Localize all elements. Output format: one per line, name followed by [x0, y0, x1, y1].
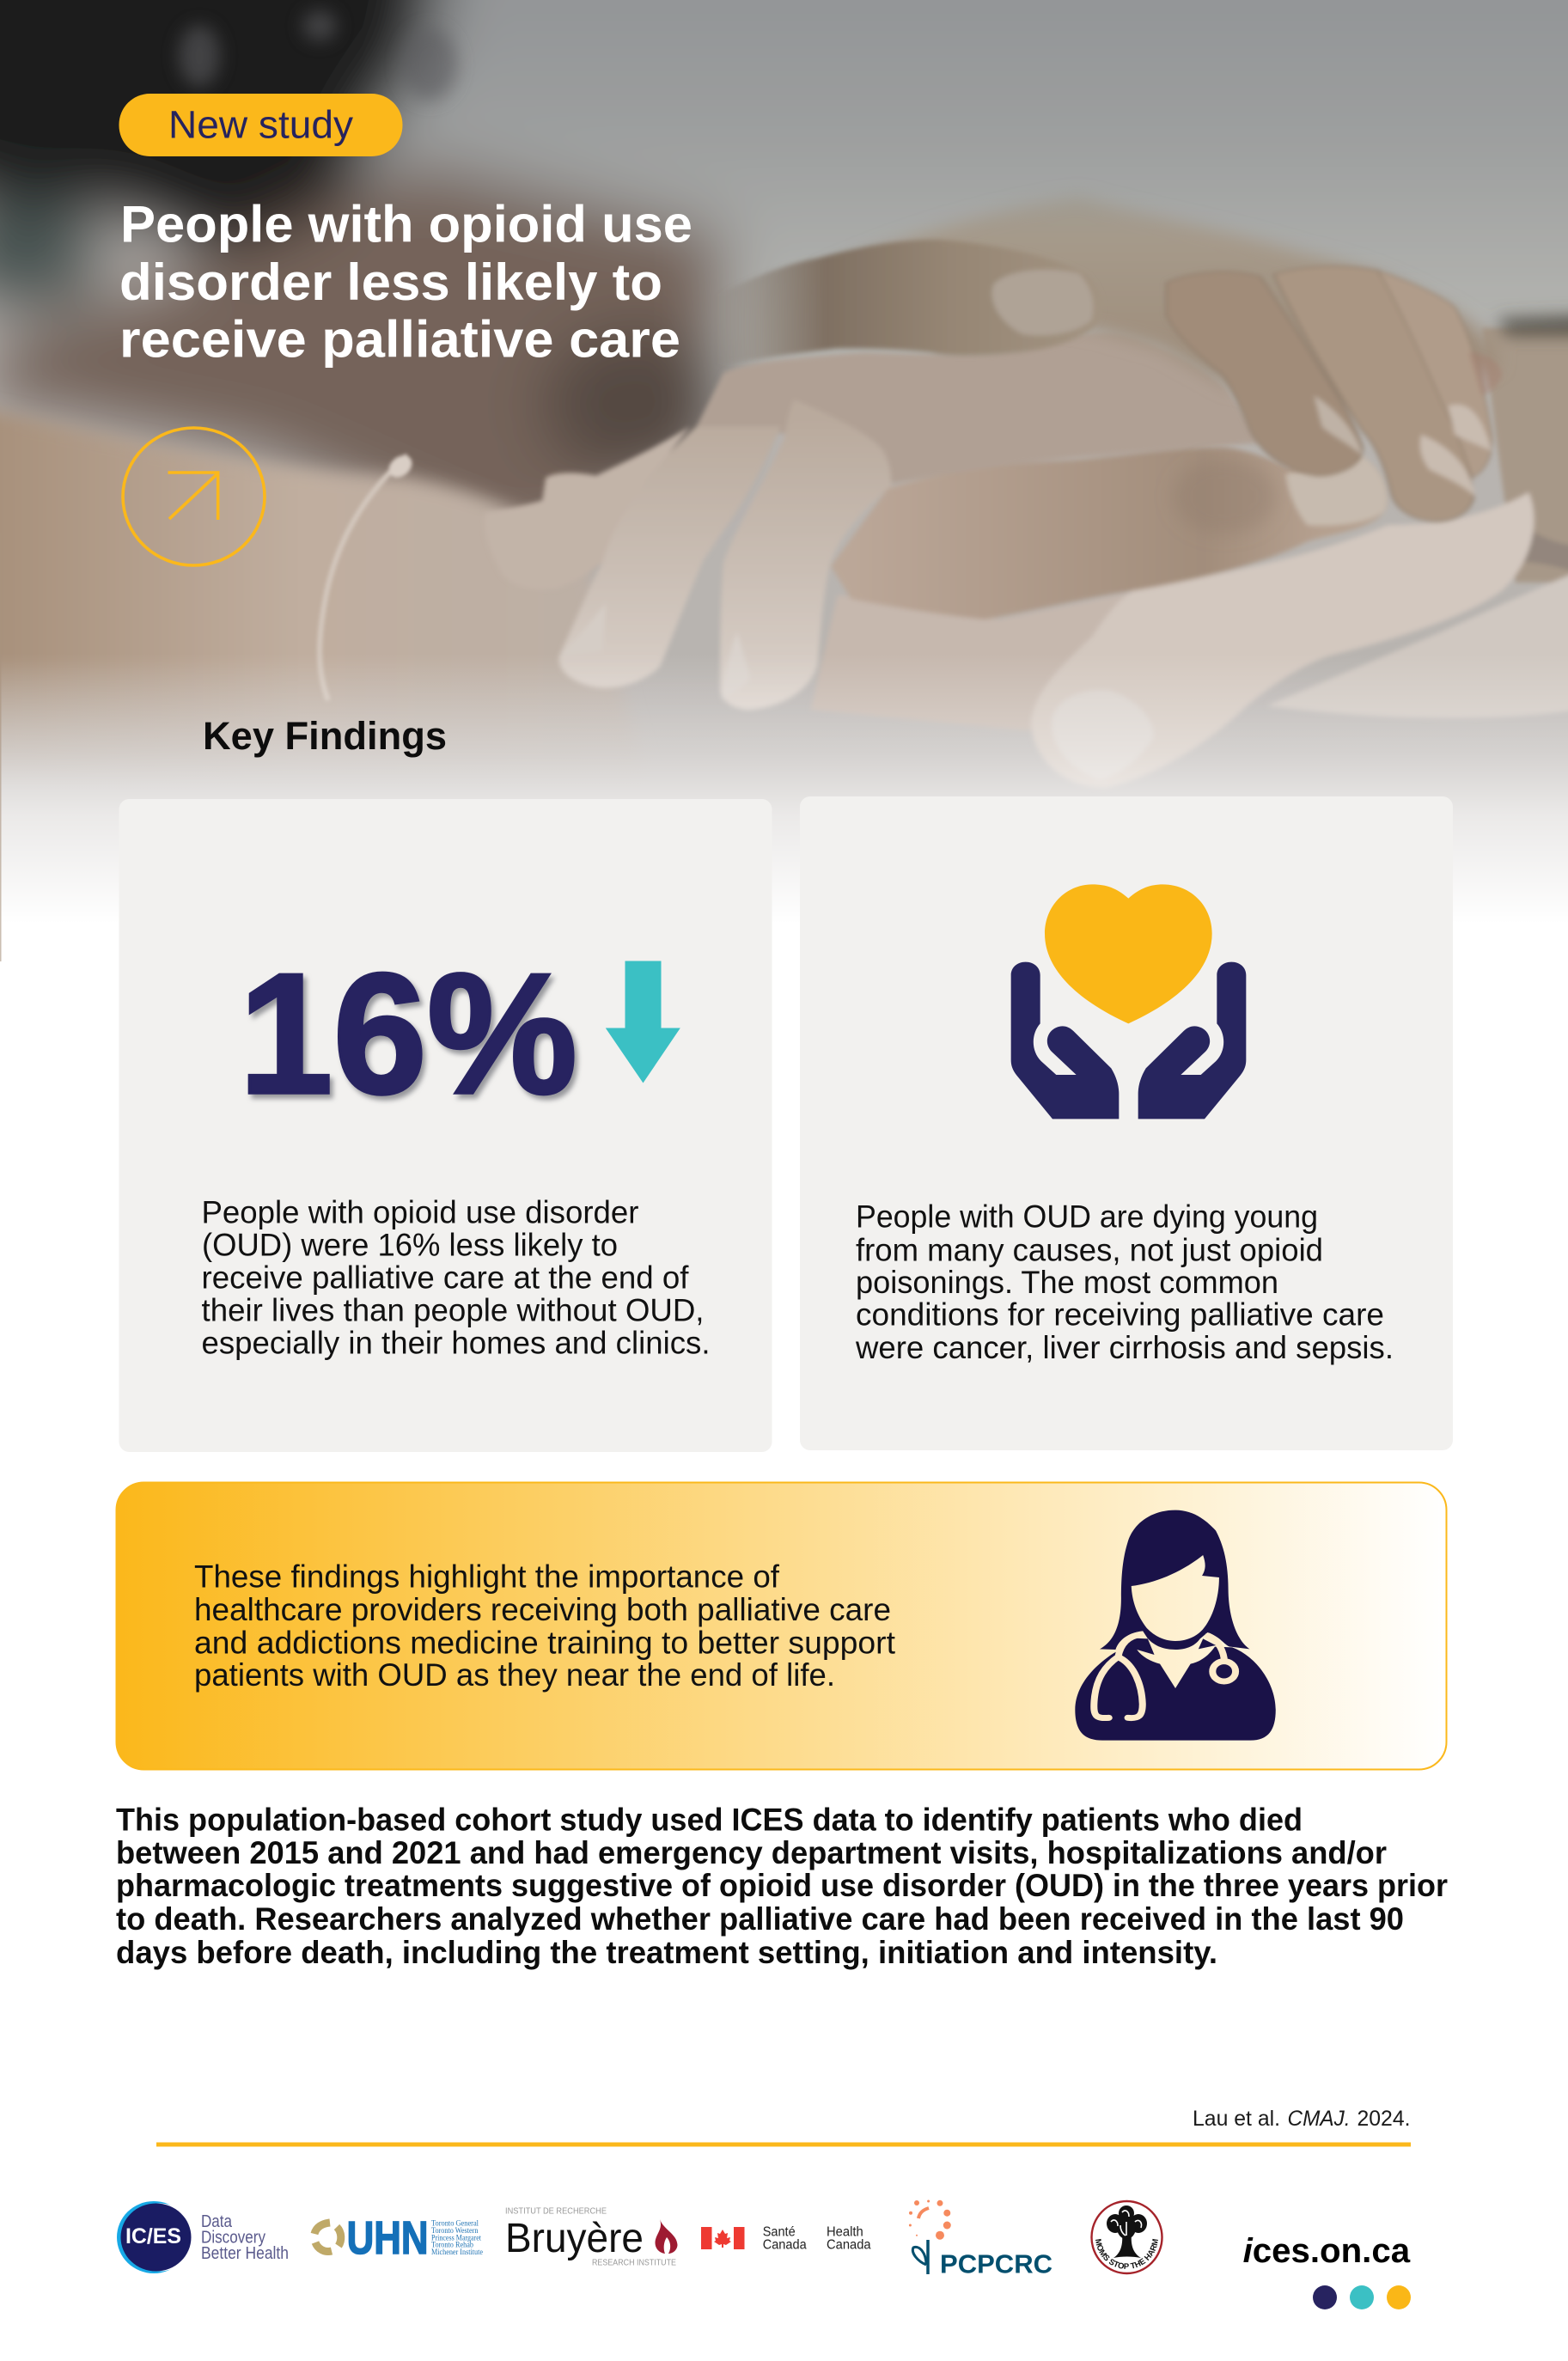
citation: Lau et al. [1193, 2107, 1280, 2131]
logo: Bruyère: Bruyère [505, 2216, 644, 2261]
logo: UHN: Princess Margaret [431, 2234, 481, 2242]
logo: Health Canada [701, 2225, 871, 2253]
hands: lower and middle [485, 328, 1568, 788]
text: 16% finding description: receive palliative care at the end of [201, 1260, 689, 1295]
text: study methods: between 2015 and 2021 and had emergency department visits, hospitalizations and/or [116, 1835, 1387, 1870]
logo: Health Canada: Health [827, 2225, 863, 2240]
text: 16% finding description: (OUD) were 16% less likely to [202, 1228, 618, 1263]
panel: 16% finding [119, 799, 772, 1452]
title: receive palliative care [119, 311, 680, 368]
text: training message: healthcare providers receiving both palliative care [194, 1592, 891, 1627]
logo: IC/ES: Discovery [201, 2229, 265, 2248]
text: 16% finding description: their lives than people without OUD, [201, 1293, 705, 1328]
logo: Health Canada: Canada [763, 2238, 807, 2253]
logo: Bruyère: INSTITUT DE RECHERCHE [505, 2207, 607, 2217]
logo: IC/ES: Data [201, 2212, 233, 2231]
text: study methods: pharmacologic treatments suggestive of opioid use disorder (OUD) in the three years prior [116, 1868, 1448, 1903]
callout: training banner [117, 1483, 1447, 1770]
white fade [0, 671, 1568, 924]
text: training message [194, 1559, 896, 1693]
text: dying young description: poisonings. The most common [856, 1265, 1278, 1300]
logo: IC/ES: Better Health [201, 2244, 289, 2263]
icon: doctor with stethoscope [1075, 1510, 1276, 1741]
citation: CMAJ. [1287, 2107, 1351, 2131]
big statistic: 16%: 16% [239, 938, 577, 1130]
logo: Moms Stop the Harm: MOMS STOP THE HARM [1095, 2239, 1158, 2269]
text: dying young description: from many causes, not just opioid [856, 1232, 1323, 1267]
text: 16% finding description: People with opioid use disorder [201, 1194, 639, 1229]
heading: Key Findings: Key Findings [203, 714, 447, 758]
bracelet [320, 451, 417, 700]
text: dying young description: People with OUD are dying young [856, 1199, 1318, 1235]
logo: PCPCRC: PCPCRC [940, 2249, 1052, 2279]
logo: Health Canada: Canada [827, 2238, 871, 2253]
text: training message: and addictions medicine training to better support [194, 1625, 896, 1660]
website: ices.on.ca: ices.on.ca [1243, 2232, 1411, 2270]
logo: UHN: Toronto General [431, 2220, 479, 2229]
title [119, 196, 692, 368]
citation [1193, 2107, 1411, 2131]
bokeh [179, 10, 457, 101]
hero photo: hands held together [0, 0, 1568, 1031]
title: People with opioid use [120, 196, 692, 253]
panel: dying young finding [800, 796, 1453, 1450]
logo: Moms Stop the Harm [1090, 2199, 1163, 2275]
badge: New study [119, 94, 402, 156]
logo: UHN: Toronto Rehab [431, 2242, 473, 2250]
logo: UHN [314, 2212, 483, 2264]
text: 16% finding description [201, 1194, 710, 1361]
decorative dots: navy, teal, yellow [1313, 2285, 1411, 2309]
logo: Bruyère [505, 2207, 677, 2268]
logo: Health Canada: Santé [763, 2225, 796, 2240]
darker knuckle on lower thumb [1215, 467, 1271, 526]
badge: New study: New study [168, 103, 353, 146]
text: training message: These findings highlight the importance of [194, 1559, 780, 1595]
logo: IC/ES: IC/ES [125, 2224, 181, 2248]
text: study methods: to death. Researchers analyzed whether palliative care had been received in the last 90 [116, 1901, 1404, 1937]
text: study methods [116, 1803, 1448, 1970]
icon: down arrow [606, 961, 680, 1083]
top hand: thumb and fingers [717, 240, 1502, 522]
icon: hands holding heart [1011, 884, 1246, 1119]
text: dying young description [855, 1199, 1394, 1365]
logo: UHN: Michener Institute [431, 2248, 483, 2257]
title: disorder less likely to [119, 253, 662, 311]
logo: IC/ES [117, 2201, 289, 2273]
text: dying young description: conditions for receiving palliative care [856, 1297, 1384, 1333]
text: 16% finding description: especially in their homes and clinics. [201, 1326, 710, 1361]
logo: Bruyère: RESEARCH INSTITUTE [592, 2259, 676, 2268]
icon: circled arrow [123, 428, 265, 565]
text: study methods: days before death, including the treatment setting, initiation and intensity. [116, 1935, 1217, 1970]
text: dying young description: were cancer, liver cirrhosis and sepsis. [855, 1330, 1394, 1365]
logo: UHN: UHN [347, 2212, 429, 2264]
logo: UHN: Toronto Western [431, 2227, 479, 2236]
text: training message: patients with OUD as they near the end of life. [194, 1657, 835, 1693]
forearm [0, 407, 602, 759]
top hand: back of hand [887, 196, 1568, 411]
citation: 2024. [1358, 2107, 1411, 2131]
text: study methods: This population-based cohort study used ICES data to identify patients who died [116, 1803, 1303, 1837]
logo: PCPCRC [909, 2199, 1052, 2279]
